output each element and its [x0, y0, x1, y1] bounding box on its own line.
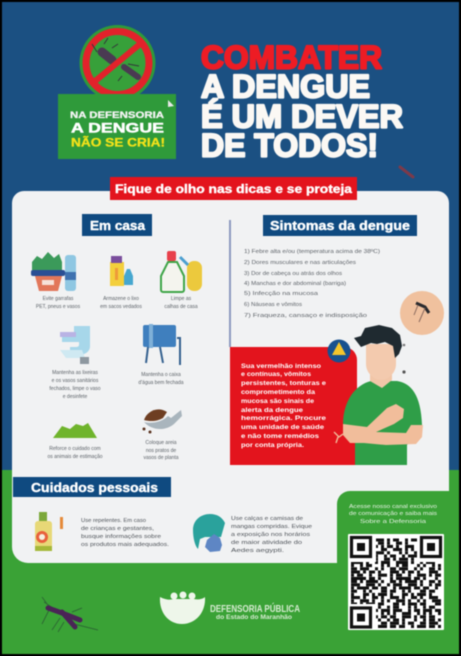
callout: warning signs: mucosa são sinais de — [241, 399, 315, 405]
caption: PET, pneus e vasos — [36, 304, 81, 310]
caption — [164, 296, 198, 310]
heading: Cuidados pessoais — [13, 477, 171, 497]
banner: Fique de olho nas dicas e se proteja — [110, 177, 357, 200]
icon: detergent bottle and sponge — [161, 251, 202, 292]
icon: warning badge — [328, 340, 350, 362]
main white panel — [12, 191, 449, 563]
icon: water tank — [143, 324, 180, 365]
caption — [49, 370, 101, 400]
tag: Na Defensoria a dengue não se cria: A DENGUE — [71, 120, 164, 136]
symptoms list: 6) Náuseas e vômitos — [244, 302, 302, 308]
caption: fechados, limpe o vaso — [49, 386, 101, 392]
section: Sintomas da dengue — [230, 215, 444, 465]
callout: warning signs: alerta da dengue — [241, 408, 304, 414]
text: QR caption: Sobre a Defensoria — [360, 519, 426, 525]
icon: long-sleeved clothing — [193, 514, 225, 552]
caption — [47, 446, 103, 460]
text: Defensoria Pública: do Estado do Maranhão — [216, 615, 292, 621]
icon: green mound — [53, 423, 97, 438]
symptoms list: 4) Manchas e dor abdominal (barriga) — [244, 281, 346, 287]
heading: Sintomas da dengue: Sintomas da dengue — [270, 218, 410, 233]
text: Defensoria Pública: DEFENSORIA PÚBLICA — [210, 602, 300, 615]
text: clothing: a exposição nos horários — [231, 532, 310, 538]
icon: toilet — [60, 326, 90, 364]
text: repellent: os produtos mais adequados. — [81, 542, 169, 548]
caption — [143, 440, 179, 461]
icon: mosquito on skin — [400, 291, 444, 374]
icon: small mosquito on blue — [400, 167, 413, 177]
logo: campaign seal — [58, 25, 176, 159]
title — [201, 40, 403, 164]
callout: warning signs: Sua vermelhão intenso — [241, 364, 321, 370]
caption: Coloque areia — [145, 440, 177, 446]
text: repellent: busque informações sobre — [81, 534, 161, 540]
caption: Mantenha o caixa — [141, 372, 181, 378]
text: clothing: Aedes aegypti. — [231, 548, 284, 554]
callout: warning signs: uma unidade de saúde — [241, 425, 325, 431]
text: clothing: Use calças e camisas de — [231, 516, 303, 522]
text: repellent: Use repelentes. Em caso — [81, 518, 146, 524]
tag: Na Defensoria a dengue não se cria: NÃO SE CRIA! — [71, 134, 165, 150]
caption: Mantenha as lixeiras — [52, 370, 98, 376]
divider line — [229, 220, 231, 347]
callout: warning signs — [230, 347, 357, 465]
caption: nos pratos de — [146, 448, 176, 454]
callout: warning signs: por conta própria. — [241, 443, 304, 449]
text: clothing: mangas compridas. Evique — [231, 524, 312, 530]
symptoms list: 1) Febre alta e/ou (temperatura acima de 38ºC) — [244, 249, 380, 255]
caption — [36, 296, 81, 310]
section: Cuidados pessoais — [13, 477, 312, 554]
title: A DENGUE — [201, 68, 370, 104]
callout: warning signs: e contínuas, vômitos — [241, 372, 312, 378]
caption: Reforce o cuidado com — [49, 446, 101, 452]
symptoms list: 3) Dor de cabeça ou atrás dos olhos — [244, 271, 342, 277]
caption: d'água bem fechada — [138, 380, 184, 386]
illustration: man with chest pain — [334, 325, 423, 465]
text: clothing: de maior atividade do — [231, 540, 302, 546]
icon: mosquito on green — [42, 597, 98, 632]
icon: repellent bottle — [35, 512, 63, 551]
text: repellent — [81, 518, 169, 548]
heading: Cuidados pessoais: Cuidados pessoais — [31, 481, 158, 495]
callout: warning signs: e não tome remédios — [241, 434, 320, 440]
symptoms list — [244, 249, 380, 319]
text: clothing — [231, 516, 312, 554]
heading: Em casa — [82, 214, 152, 236]
callout: warning signs: comprometimento da — [241, 390, 316, 396]
text: Defensoria Pública — [210, 602, 300, 621]
tag: Na Defensoria a dengue não se cria — [58, 94, 176, 159]
caption: em sacos vedados — [100, 304, 142, 310]
caption — [138, 372, 184, 386]
caption: Limpe as — [171, 296, 192, 302]
callout: warning signs: hemorrágica. Procure — [241, 416, 327, 422]
icon: Defensoria emblem — [160, 592, 205, 624]
icon: shovel of sand — [142, 409, 182, 434]
symptoms list: 5) Infecção na mucosa — [244, 291, 318, 297]
QR block — [348, 504, 444, 630]
QR code — [348, 534, 444, 630]
symptoms list: 2) Dores musculares e nas articulações — [244, 260, 356, 266]
title: COMBATER — [201, 40, 382, 76]
title: É UM DEVER — [201, 98, 403, 134]
title: DE TODOS! — [201, 128, 378, 164]
icon: bags and containers — [110, 256, 133, 286]
text: QR caption — [349, 504, 437, 525]
caption: vasos de planta — [143, 455, 179, 461]
symptoms list: 7) Fraqueza, cansaço e indisposição — [244, 313, 367, 319]
icon: planter and bottle — [31, 252, 76, 291]
caption: e desinfete — [63, 394, 87, 400]
callout: warning signs: persistentes, tonturas e — [241, 381, 327, 387]
caption: Evite garrafas — [43, 296, 74, 302]
text: QR caption: de comunicação e saiba mais — [349, 511, 437, 517]
logo: Defensoria Pública — [160, 592, 300, 624]
text: QR caption: Acesse nosso canal exclusivo — [349, 504, 437, 510]
caption — [100, 296, 142, 310]
caption: Armazene o lixo — [103, 296, 139, 302]
caption: os animais de estimação — [47, 454, 103, 460]
caption: e os vasos sanitários — [52, 378, 99, 384]
heading: Em casa: Em casa — [90, 218, 146, 233]
text: repellent: de crianças e gestantes, — [81, 526, 155, 532]
icon: crossed-out mosquito — [80, 25, 156, 101]
caption: calhas de casa — [164, 304, 198, 310]
tag: Na Defensoria a dengue não se cria: NA DEFENSORIA — [70, 110, 164, 121]
heading: Sintomas da dengue — [263, 215, 417, 236]
section: Em casa — [31, 214, 202, 461]
banner: Fique de olho nas dicas e se proteja: Fique de olho nas dicas e se proteja — [115, 184, 353, 196]
